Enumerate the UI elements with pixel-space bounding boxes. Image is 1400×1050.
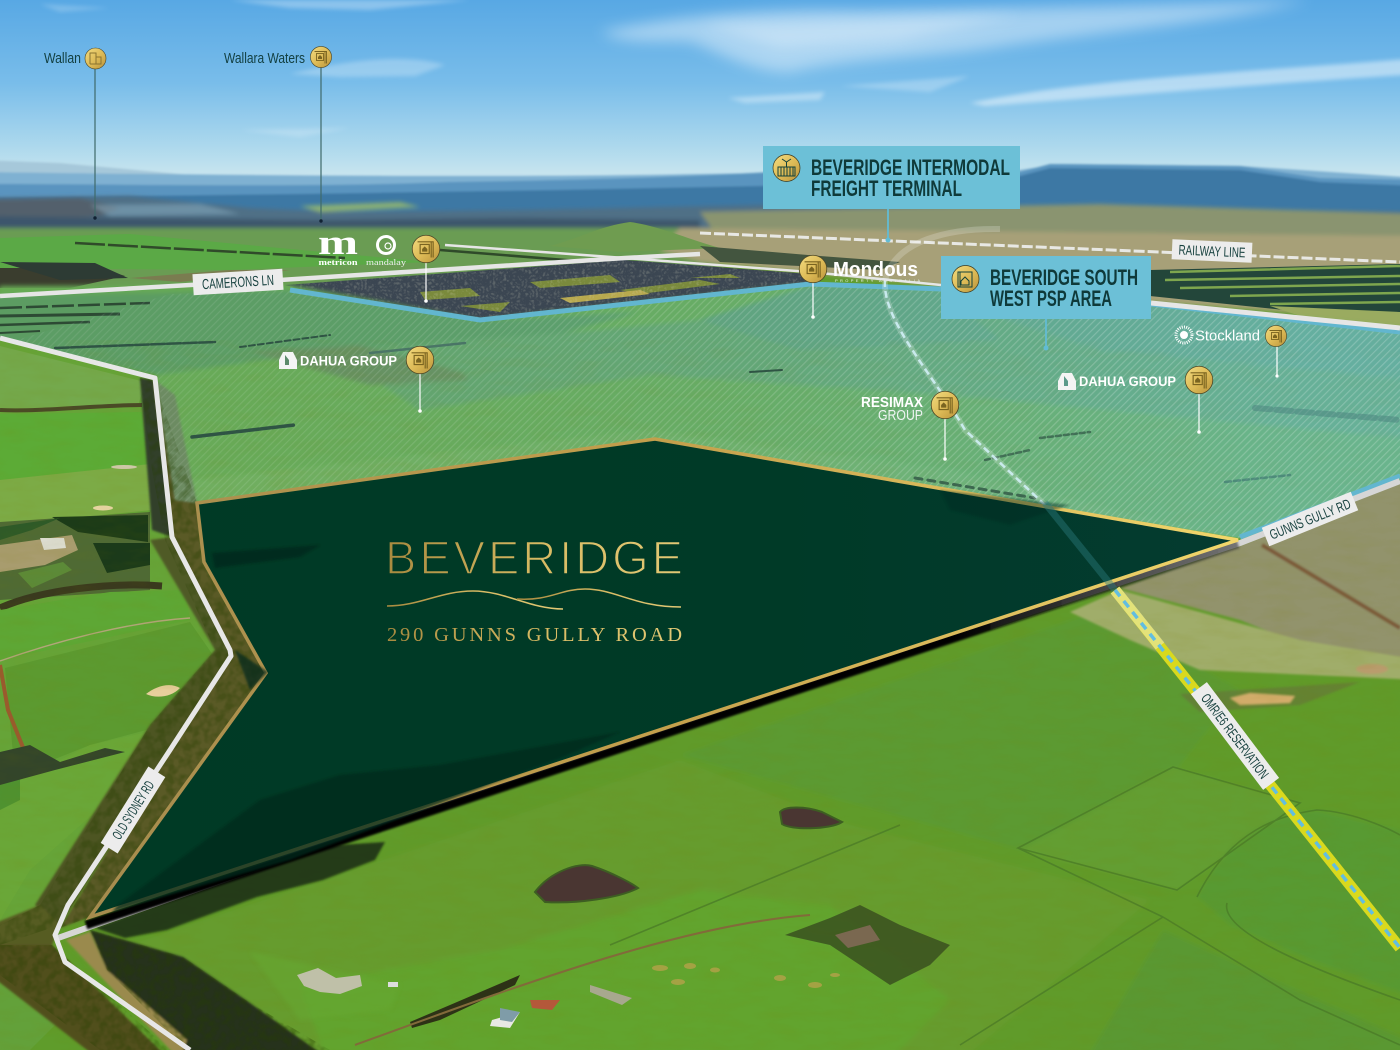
- mid ground paddocks: [0, 284, 1400, 540]
- developer pin: Dahua Group west: DAHUA GROUP: [300, 354, 397, 368]
- developer pin: Metricon and Mandalay: m: [318, 223, 358, 262]
- developer pin: Metricon and Mandalay: metricon: [318, 257, 358, 267]
- windbreak trees: [55, 335, 1400, 498]
- road label: Railway Line: RAILWAY LINE: [1178, 242, 1246, 260]
- distant farmland: [0, 196, 1400, 322]
- location: Wallara Waters: [224, 46, 332, 223]
- location: Wallan: Wallan: [44, 50, 81, 67]
- developer pin: Metricon and Mandalay: [318, 223, 440, 303]
- railway line: [700, 233, 1400, 262]
- clouds: [40, 0, 1400, 137]
- left farmland: [0, 338, 232, 1050]
- road label: Railway Line: [1172, 239, 1252, 263]
- developer pin: Dahua Group east: DAHUA GROUP: [1079, 374, 1176, 389]
- distant paddocks and hills: [0, 222, 1400, 326]
- callout: Beveridge South West PSP Area: BEVERIDGE SOUTH: [990, 265, 1138, 290]
- Old Sydney Rd: [0, 338, 231, 1050]
- texture overlay: [0, 340, 1400, 1050]
- dry paddock: [1070, 474, 1400, 712]
- developer pin: Mondous: [799, 255, 920, 319]
- sky background: [0, 0, 1400, 185]
- callout: Beveridge Intermodal Freight Terminal: [763, 146, 1020, 242]
- site logo: Beveridge: BEVERIDGE: [385, 531, 683, 584]
- road label: Gunns Gully Rd: [1262, 492, 1358, 546]
- developer pin: Resimax Group: GROUP: [878, 407, 923, 424]
- tree shadow beneath the road: [95, 842, 385, 938]
- PSP hatched area: [10, 284, 1400, 538]
- distant mountains: [0, 160, 1400, 250]
- callout: Beveridge South West PSP Area: [941, 256, 1151, 350]
- developer pin: Resimax Group: [861, 391, 959, 461]
- tree canopy texture: [0, 375, 335, 1050]
- developer pin: Mondous: PROPERTY AUSTRALIA: [835, 278, 920, 283]
- paddock fences: [610, 767, 1400, 1045]
- road label: Old Sydney Rd: [101, 767, 165, 853]
- callout: Beveridge Intermodal Freight Terminal: BEVERIDGE INTERMODAL: [811, 155, 1010, 180]
- road label: Old Sydney Rd: OLD SYDNEY RD: [109, 778, 157, 842]
- foreground paddocks: [62, 478, 1400, 1050]
- suburb: Wallara Waters: [286, 260, 807, 318]
- road label: Camerons Ln: [192, 269, 284, 295]
- site logo: Beveridge: 290 GUNNS GULLY ROAD: [387, 624, 682, 646]
- Site polygon: [90, 439, 1238, 917]
- callout: Beveridge Intermodal Freight Terminal: FREIGHT TERMINAL: [811, 176, 962, 201]
- callout: Beveridge South West PSP Area: WEST PSP AREA: [990, 286, 1112, 311]
- developer pin: Stockland: [1176, 325, 1287, 378]
- far left hedgerows: [0, 303, 150, 333]
- location: Wallara Waters: Wallara Waters: [224, 50, 305, 67]
- road label: OMR/E6 Reservation: [1191, 682, 1279, 790]
- road label: Camerons Ln: CAMERONS LN: [202, 273, 274, 293]
- OMR/E6 corridor lower: [1115, 590, 1400, 948]
- road label: Gunns Gully Rd: GUNNS GULLY RD: [1267, 495, 1353, 543]
- developer pin: Mondous: Mondous: [833, 259, 918, 281]
- Camerons Lane and northern road: [0, 245, 1400, 328]
- developer pin: Metricon and Mandalay: mandalay: [366, 257, 407, 267]
- site logo: Beveridge: [385, 531, 683, 646]
- farm buildings: [250, 905, 950, 1045]
- location: Wallan: [44, 48, 106, 220]
- Gunns Gully Rd: [58, 481, 1400, 938]
- developer pin: Stockland: Stockland: [1195, 328, 1260, 344]
- OMR/E6 corridor upper: [885, 229, 1045, 505]
- developer pin: Dahua Group west: [279, 346, 434, 413]
- roadside trees: [0, 378, 330, 1050]
- developer pin: Resimax Group: RESIMAX: [861, 394, 923, 411]
- road label: OMR/E6 Reservation: OMR/E6 RESERVATION: [1198, 690, 1272, 782]
- developer pin: Dahua Group east: [1058, 366, 1213, 434]
- ponds: [535, 808, 842, 902]
